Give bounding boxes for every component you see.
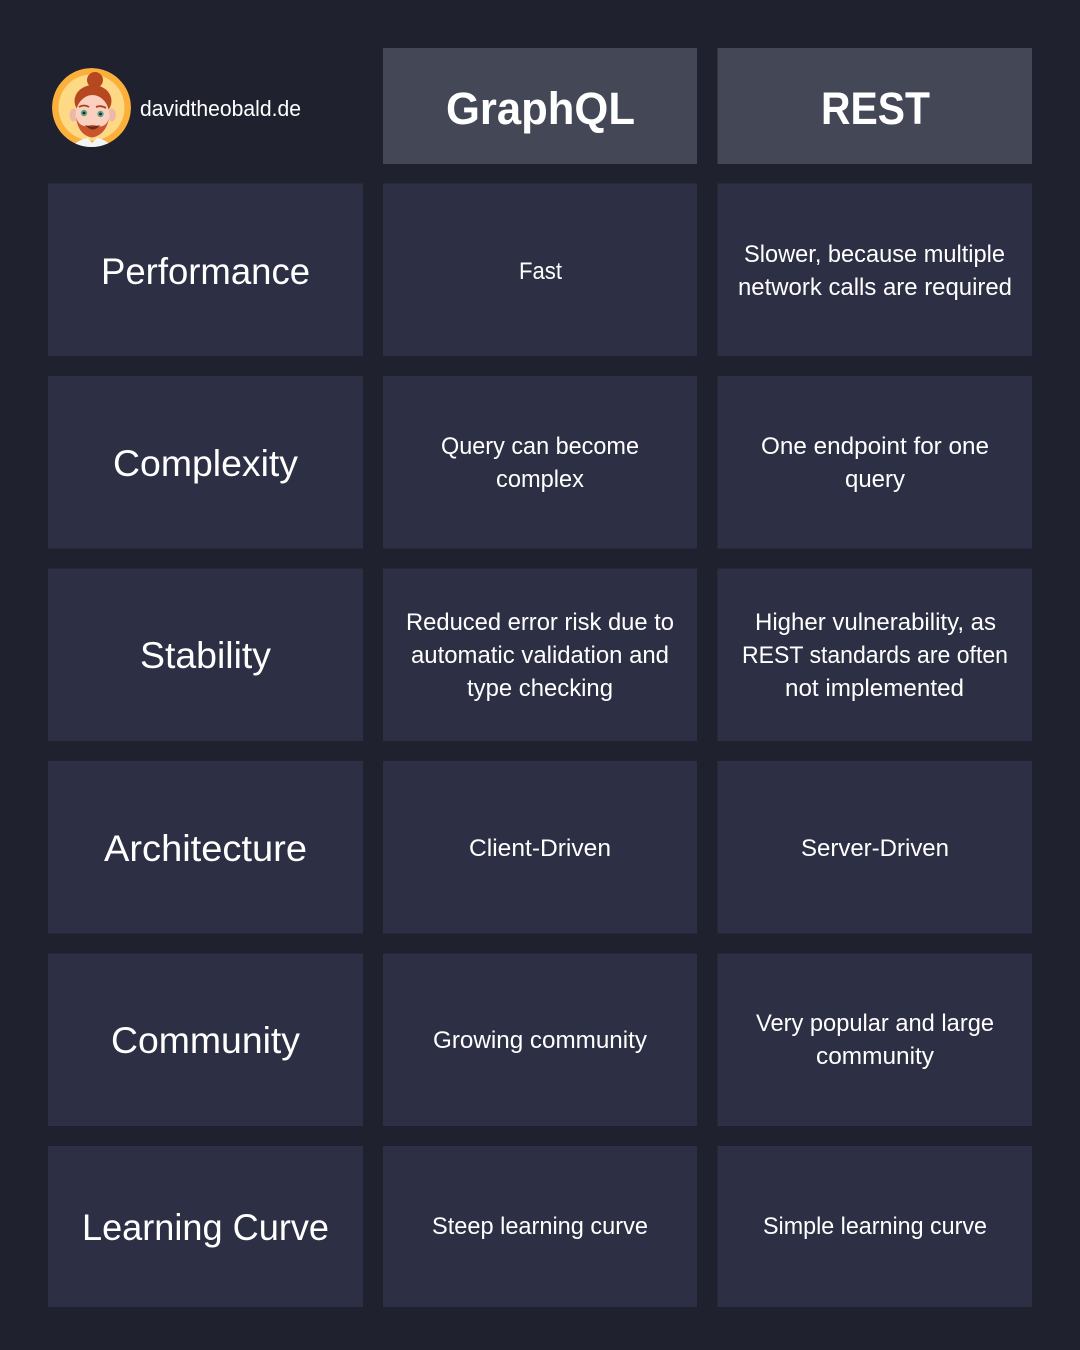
avatar logo (52, 68, 131, 148)
label: Performance (48, 184, 363, 356)
REST architecture: Server-Driven (801, 835, 949, 862)
REST complexity: One endpoint for one (761, 433, 989, 460)
REST performance: Slower, because multiple (744, 241, 1005, 268)
GraphQL architecture: Client-Driven (469, 835, 611, 862)
REST stability: not implemented (785, 675, 964, 702)
label: Learning Curve (48, 1146, 363, 1307)
GraphQL stability: Reduced error risk due to (406, 609, 674, 636)
REST learning curve: Simple learning curve (763, 1213, 987, 1240)
REST community (718, 954, 1032, 1126)
GraphQL stability (383, 568, 697, 741)
GraphQL community (383, 954, 697, 1126)
REST community: community (816, 1043, 934, 1070)
GraphQL learning curve (383, 1146, 697, 1307)
GraphQL complexity: complex (496, 466, 584, 493)
GraphQL learning curve: Steep learning curve (432, 1213, 648, 1240)
label: Complexity: Complexity (113, 443, 299, 484)
REST performance (718, 184, 1032, 356)
REST community: Very popular and large (756, 1010, 994, 1037)
REST complexity: query (845, 466, 905, 493)
GraphQL performance (383, 184, 697, 356)
GraphQL stability: automatic validation and (411, 642, 669, 669)
header: GraphQL (383, 48, 697, 164)
label: Complexity (48, 376, 363, 548)
REST architecture (718, 761, 1032, 934)
REST stability: REST standards are often (742, 642, 1008, 669)
GraphQL community: Growing community (433, 1027, 647, 1054)
label: Stability: Stability (140, 635, 271, 676)
GraphQL architecture (383, 761, 697, 934)
label: Stability (48, 568, 363, 741)
label: Architecture (48, 761, 363, 934)
label: Community: Community (111, 1020, 300, 1061)
header: GraphQL: GraphQL (446, 83, 635, 134)
REST stability (718, 568, 1032, 741)
label: Performance: Performance (101, 251, 310, 292)
label: Community (48, 954, 363, 1126)
header: REST (718, 48, 1032, 164)
REST complexity (718, 376, 1032, 548)
label: Learning Curve: Learning Curve (82, 1207, 329, 1248)
GraphQL complexity: Query can become (441, 433, 639, 460)
REST performance: network calls are required (738, 274, 1012, 301)
header: REST: REST (821, 83, 930, 134)
GraphQL performance: Fast (519, 258, 562, 285)
site name: davidtheobald.de (140, 96, 301, 121)
REST stability: Higher vulnerability, as (755, 609, 996, 636)
label: Architecture: Architecture (104, 828, 307, 869)
GraphQL stability: type checking (467, 675, 613, 702)
GraphQL complexity (383, 376, 697, 548)
REST learning curve (718, 1146, 1032, 1307)
